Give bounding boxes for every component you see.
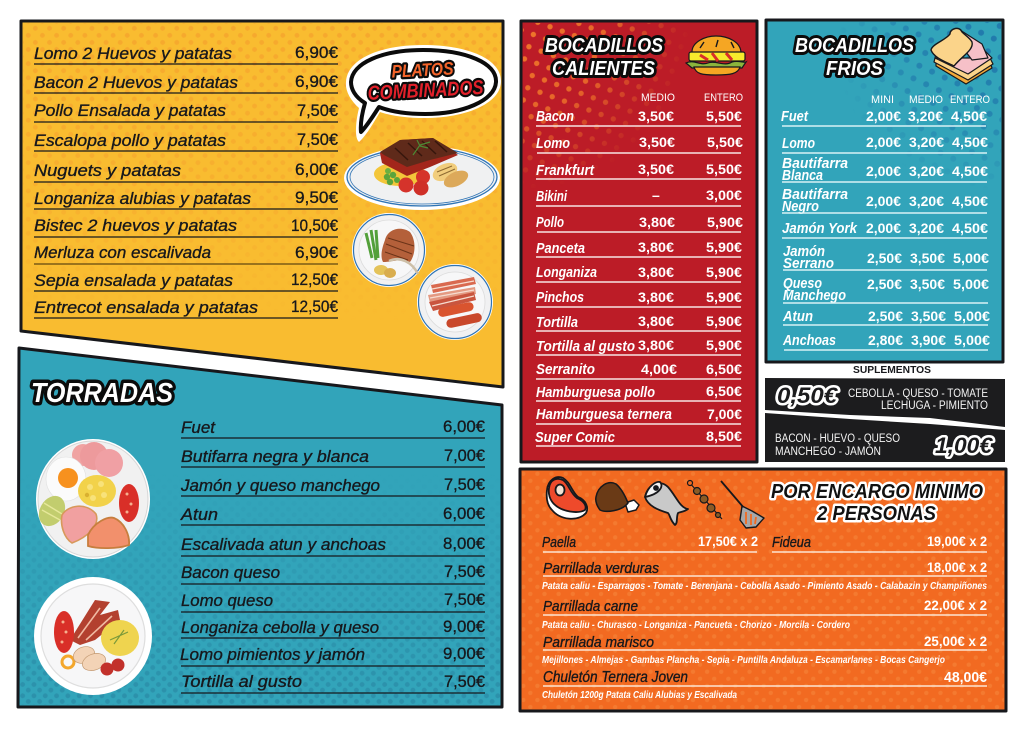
banner: 1,00 euro supplements: MANCHEGO - JAMÓN xyxy=(775,445,881,458)
list: torradas rows: Jamón y queso manchego xyxy=(180,476,380,495)
icon: spatula xyxy=(721,481,764,528)
heading: por encargo minimo 2 personas: 2 PERSONAS xyxy=(816,503,937,525)
list: bocadillos calientes rows: Super Comic xyxy=(535,430,615,446)
icon: burger xyxy=(686,36,746,75)
list: bocadillos calientes rows: 7,00€ xyxy=(707,406,742,422)
illustration: lamb chop plate xyxy=(352,213,426,287)
list: torradas rows: Atun xyxy=(180,505,218,524)
list: bocadillos frios rows: Jamón York xyxy=(782,221,858,237)
list: platos combinados rows: 6,00€ xyxy=(295,161,338,179)
heading: bocadillos calientes: CALIENTES xyxy=(552,58,656,80)
list: bocadillos calientes rows: 3,00€ xyxy=(706,187,742,203)
list: bocadillos calientes rows: 3,80€ xyxy=(639,214,675,230)
list: platos combinados rows: Sepia ensalada y patatas xyxy=(34,271,234,290)
list: bocadillos frios rows: 2,00€ xyxy=(866,193,901,209)
panel: suplementos xyxy=(765,364,1005,462)
list: por encargo rows: 18,00€ x 2 xyxy=(927,559,987,575)
list: torradas rows: Lomo pimientos y jamón xyxy=(180,645,365,664)
list: bocadillos calientes rows: Hamburguesa pollo xyxy=(536,385,655,401)
list: por encargo rows: Fideua xyxy=(772,534,811,551)
list: bocadillos frios rows: Blanca xyxy=(782,168,823,184)
banner: 1,00 euro supplements: BACON - HUEVO - QUESO xyxy=(775,433,900,445)
list: bocadillos frios rows: 2,00€ xyxy=(866,108,901,124)
list: bocadillos frios rows: 3,20€ xyxy=(908,108,943,124)
list: bocadillos frios rows xyxy=(781,108,990,350)
list: bocadillos calientes rows: 5,90€ xyxy=(706,264,742,280)
list: bocadillos frios rows: 3,20€ xyxy=(909,163,944,179)
illustration: steak plate xyxy=(344,138,500,210)
list: bocadillos calientes rows: Hamburguesa ternera xyxy=(536,407,672,423)
list: bocadillos frios rows: 2,00€ xyxy=(866,163,901,179)
list: bocadillos frios rows: 2,50€ xyxy=(867,250,902,266)
list: por encargo rows: Parrillada carne xyxy=(543,598,638,615)
list: platos combinados rows: 9,50€ xyxy=(295,189,338,207)
list: bocadillos calientes rows: Tortilla al gusto xyxy=(536,339,635,355)
list: bocadillos frios rows: Negro xyxy=(782,199,819,215)
list: platos combinados rows: 6,90€ xyxy=(295,73,338,91)
list: bocadillos frios rows: 5,00€ xyxy=(954,308,990,324)
illustration: breakfast plate with bacon xyxy=(34,577,152,695)
icon: fish xyxy=(645,482,688,525)
list: bocadillos calientes rows xyxy=(535,108,743,446)
illustration: bacon and sausage plate xyxy=(417,264,493,340)
list: bocadillos frios rows: 3,50€ xyxy=(910,276,945,292)
list: torradas rows: Butifarra negra y blanca xyxy=(181,447,369,466)
list: bocadillos frios rows: 2,50€ xyxy=(867,276,902,292)
list: bocadillos calientes rows: 3,50€ xyxy=(639,134,675,150)
icon: skewer xyxy=(688,480,722,519)
list: torradas rows xyxy=(180,418,485,693)
list: torradas rows: 7,00€ xyxy=(444,447,485,465)
list: bocadillos frios rows: 3,90€ xyxy=(911,332,946,348)
list: bocadillos calientes rows: 5,50€ xyxy=(706,161,742,177)
list: platos combinados rows: Nuguets y patatas xyxy=(34,161,182,180)
list: platos combinados rows: Lomo 2 Huevos y patatas xyxy=(34,44,233,63)
illustration: breakfast plate with egg and toast xyxy=(34,439,150,559)
list: bocadillos frios rows: 3,50€ xyxy=(910,250,945,266)
list: bocadillos frios rows: 4,50€ xyxy=(952,193,988,209)
list: bocadillos frios rows: 3,20€ xyxy=(909,220,944,236)
list: bocadillos calientes rows: 5,90€ xyxy=(707,214,743,230)
list: bocadillos frios rows: 2,50€ xyxy=(868,308,903,324)
list: bocadillos calientes rows: 5,90€ xyxy=(706,313,742,329)
list: bocadillos frios rows: 4,50€ xyxy=(952,134,988,150)
list: por encargo rows: Parrillada verduras xyxy=(543,560,659,577)
list: torradas rows: 9,00€ xyxy=(443,645,485,663)
list: por encargo rows: Chuletón Ternera Joven xyxy=(543,669,688,686)
list: torradas rows: Longaniza cebolla y queso xyxy=(181,618,379,637)
list: bocadillos frios rows: Bautifarra xyxy=(782,156,848,172)
list: bocadillos frios rows: Lomo xyxy=(782,136,815,152)
heading: suplementos: SUPLEMENTOS xyxy=(853,364,931,376)
list: platos combinados rows xyxy=(34,44,338,318)
list: por encargo rows: Paella xyxy=(542,534,576,551)
list: por encargo rows: 19,00€ x 2 xyxy=(927,533,987,549)
panel: torradas xyxy=(18,348,502,707)
column headers: MEDIO xyxy=(641,92,675,104)
list: platos combinados rows: Bacon 2 Huevos y patatas xyxy=(34,73,238,92)
icon: chicken leg xyxy=(596,483,639,512)
list: por encargo rows xyxy=(542,533,988,701)
list: por encargo rows: Patata caliu - Churasco - Longaniza - Pancueta - Chorizo - Morcila - Cordero xyxy=(542,619,850,631)
heading: por encargo minimo 2 personas: POR ENCARGO MINIMO xyxy=(771,481,983,503)
list: bocadillos frios rows: 5,00€ xyxy=(954,332,990,348)
list: bocadillos frios rows: Anchoas xyxy=(782,333,836,349)
list: bocadillos frios rows: Jamón xyxy=(783,244,825,260)
list: bocadillos frios rows: 2,80€ xyxy=(868,332,903,348)
heading: bocadillos frios: BOCADILLOS xyxy=(795,35,915,57)
banner: 0,50 euro supplements: CEBOLLA - QUESO - TOMATE xyxy=(848,388,988,400)
list: por encargo rows: 17,50€ x 2 xyxy=(698,533,758,549)
list: bocadillos calientes rows: 3,80€ xyxy=(638,239,674,255)
list: bocadillos frios rows: Queso xyxy=(783,276,822,292)
heading: bocadillos calientes: BOCADILLOS xyxy=(545,35,664,57)
speech bubble: platos combinados: COMBINADOS xyxy=(367,77,485,105)
list: bocadillos calientes rows: 8,50€ xyxy=(706,428,742,444)
list: platos combinados rows: Pollo Ensalada y patatas xyxy=(34,101,227,120)
heading: por encargo minimo 2 personas xyxy=(771,481,983,525)
list: por encargo rows: 48,00€ xyxy=(944,669,988,686)
list: bocadillos calientes rows: Longaniza xyxy=(536,265,597,281)
list: torradas rows: 8,00€ xyxy=(443,535,485,553)
column headers xyxy=(871,94,990,106)
list: bocadillos frios rows: 3,20€ xyxy=(909,193,944,209)
list: bocadillos calientes rows: 6,50€ xyxy=(706,361,742,377)
list: bocadillos frios rows: 2,00€ xyxy=(866,220,901,236)
list: bocadillos calientes rows: Frankfurt xyxy=(536,163,595,179)
speech bubble: platos combinados: PLATOS xyxy=(391,58,454,82)
list: bocadillos calientes rows: 3,80€ xyxy=(638,337,674,353)
list: bocadillos calientes rows: Lomo xyxy=(536,136,570,152)
list: torradas rows: Bacon queso xyxy=(181,563,280,582)
list: torradas rows: 6,00€ xyxy=(443,418,485,436)
panel: platos combinados xyxy=(21,21,503,387)
list: torradas rows: Fuet xyxy=(181,418,216,437)
list: bocadillos calientes rows: 6,50€ xyxy=(706,383,742,399)
banner: 1,00 euro supplements xyxy=(765,413,1005,462)
list: bocadillos calientes rows: Bikini xyxy=(536,189,568,205)
list: bocadillos frios rows: 3,50€ xyxy=(911,308,946,324)
list: bocadillos frios rows: 5,00€ xyxy=(953,250,989,266)
list: torradas rows: 7,50€ xyxy=(444,476,485,494)
list: torradas rows: 7,50€ xyxy=(444,563,485,581)
banner: 0,50 euro supplements: 0,50€ xyxy=(777,383,839,408)
list: bocadillos calientes rows: Tortilla xyxy=(536,315,578,331)
list: bocadillos calientes rows: Serranito xyxy=(536,362,595,378)
speech bubble: platos combinados xyxy=(346,45,501,142)
list: torradas rows: Escalivada atun y anchoas xyxy=(181,535,386,554)
icon: raw meat xyxy=(547,477,587,519)
list: torradas rows: 9,00€ xyxy=(443,618,485,636)
heading: torradas: TORRADAS xyxy=(31,377,173,408)
panel: bocadillos frios xyxy=(766,20,1003,362)
list: platos combinados rows: 12,50€ xyxy=(291,271,338,289)
list: torradas rows: Tortilla al gusto xyxy=(181,672,302,691)
list: bocadillos calientes rows: 3,80€ xyxy=(638,264,674,280)
column headers: ENTERO xyxy=(950,94,990,106)
list: platos combinados rows: Entrecot ensalada y patatas xyxy=(34,298,259,317)
list: bocadillos frios rows: Manchego xyxy=(783,288,846,304)
list: bocadillos frios rows: 4,50€ xyxy=(951,108,987,124)
list: bocadillos calientes rows: Pinchos xyxy=(536,290,584,306)
list: bocadillos frios rows: 5,00€ xyxy=(953,276,989,292)
list: torradas rows: 7,50€ xyxy=(444,673,485,691)
list: bocadillos calientes rows: 5,90€ xyxy=(706,239,742,255)
list: bocadillos calientes rows: 5,50€ xyxy=(706,108,742,124)
list: por encargo rows: Chuletón 1200g Patata Caliu Alubias y Escalivada xyxy=(542,689,737,701)
icon: sandwich xyxy=(931,28,993,84)
list: por encargo rows: Parrillada marisco xyxy=(543,634,654,651)
list: bocadillos calientes rows: Pollo xyxy=(536,215,564,231)
list: platos combinados rows: 12,50€ xyxy=(291,298,338,316)
list: bocadillos calientes rows: 5,50€ xyxy=(707,134,743,150)
list: bocadillos calientes rows: 3,80€ xyxy=(638,313,674,329)
heading: bocadillos calientes xyxy=(545,35,664,80)
list: por encargo rows: 22,00€ x 2 xyxy=(924,597,987,613)
list: bocadillos frios rows: Serrano xyxy=(783,256,834,272)
list: platos combinados rows: 7,50€ xyxy=(297,131,338,149)
list: bocadillos calientes rows: 3,50€ xyxy=(638,161,674,177)
list: bocadillos frios rows: 2,00€ xyxy=(866,134,901,150)
column headers: ENTERO xyxy=(704,92,743,104)
list: torradas rows: Lomo queso xyxy=(181,591,273,610)
panel: por encargo xyxy=(520,469,1006,711)
column headers: MEDIO xyxy=(909,94,943,106)
panel: bocadillos calientes xyxy=(521,21,757,462)
list: bocadillos frios rows: Atun xyxy=(782,309,813,325)
list: bocadillos calientes rows: 5,90€ xyxy=(706,289,742,305)
list: bocadillos calientes rows: 3,80€ xyxy=(638,289,674,305)
list: platos combinados rows: Bistec 2 huevos y patatas xyxy=(34,216,238,235)
heading: bocadillos frios xyxy=(795,35,915,80)
heading: bocadillos frios: FRIOS xyxy=(826,58,884,80)
list: platos combinados rows: 10,50€ xyxy=(291,217,338,235)
list: bocadillos frios rows: Bautifarra xyxy=(782,187,848,203)
list: bocadillos calientes rows: Bacon xyxy=(536,109,574,125)
column headers: MINI xyxy=(871,94,894,106)
list: bocadillos frios rows: 4,50€ xyxy=(952,220,988,236)
list: bocadillos frios rows: 4,50€ xyxy=(952,163,988,179)
list: bocadillos calientes rows: Panceta xyxy=(536,241,585,257)
list: bocadillos calientes rows: 3,50€ xyxy=(638,108,674,124)
list: bocadillos calientes rows: 4,00€ xyxy=(641,361,677,377)
list: platos combinados rows: 6,90€ xyxy=(295,244,338,262)
list: bocadillos calientes rows: – xyxy=(652,187,660,203)
column headers xyxy=(641,92,743,104)
banner: 1,00 euro supplements: 1,00€ xyxy=(935,433,994,458)
list: bocadillos frios rows: Fuet xyxy=(781,109,809,125)
list: torradas rows: 7,50€ xyxy=(444,591,485,609)
list: por encargo rows: 25,00€ x 2 xyxy=(924,633,987,649)
list: platos combinados rows: Merluza con escalivada xyxy=(34,243,211,262)
list: torradas rows: 6,00€ xyxy=(443,505,485,523)
list: platos combinados rows: 7,50€ xyxy=(297,102,338,120)
list: platos combinados rows: 6,90€ xyxy=(295,44,338,62)
list: platos combinados rows: Longaniza alubias y patatas xyxy=(34,189,252,208)
list: bocadillos frios rows: 3,20€ xyxy=(909,134,944,150)
list: bocadillos calientes rows: 5,90€ xyxy=(706,337,742,353)
banner: 0,50 euro supplements: LECHUGA - PIMIENTO xyxy=(881,400,988,412)
banner: 0,50 euro supplements xyxy=(765,378,1005,427)
list: platos combinados rows: Escalopa pollo y patatas xyxy=(34,131,227,150)
